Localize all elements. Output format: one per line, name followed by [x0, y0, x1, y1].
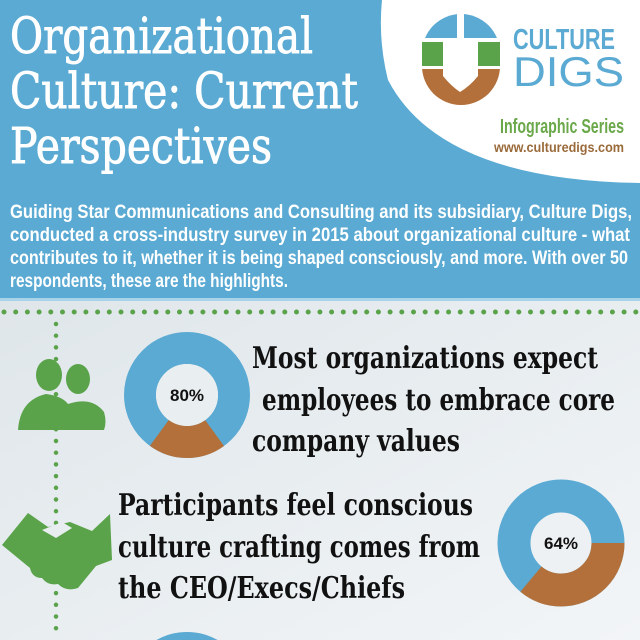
- donut 3 (partial): [156, 632, 218, 640]
- statement 1: company values: [252, 424, 460, 459]
- logo panel: white ellipse: DIGS: [513, 48, 624, 95]
- statement 2: the CEO/Execs/Chiefs: [118, 571, 405, 606]
- donut 64%: [514, 496, 608, 590]
- title: Culture: Current: [10, 62, 358, 120]
- icon: culture digs logo circle: [422, 14, 500, 105]
- header background: [0, 0, 640, 300]
- logo panel: white ellipse: www.culturedigs.com: [493, 139, 624, 155]
- statement 1: [252, 341, 615, 459]
- statement 2: Participants feel conscious: [118, 488, 473, 523]
- statement 2: [118, 488, 480, 606]
- title: Perspectives: [10, 117, 272, 175]
- donut 80%: [121, 329, 253, 461]
- title: Organizational: [10, 7, 313, 65]
- icon: people: [18, 359, 106, 430]
- description text: respondents, these are the highlights.: [10, 271, 288, 292]
- dotted timeline: [4, 312, 638, 636]
- donut 80%: 80%: [170, 386, 204, 405]
- statement 2: culture crafting comes from: [118, 530, 480, 565]
- icon: handshake: [2, 513, 112, 589]
- donut 64%: 64%: [544, 534, 578, 553]
- description text: [10, 202, 632, 292]
- logo panel: white ellipse: [381, 0, 640, 183]
- title: [10, 7, 358, 175]
